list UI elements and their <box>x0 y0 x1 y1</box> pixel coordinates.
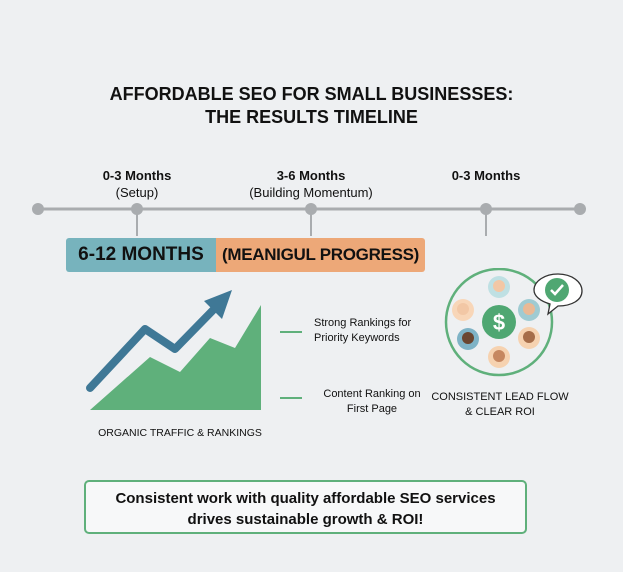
callout box <box>84 480 527 534</box>
timeline labels: (Setup) <box>116 185 158 200</box>
lead flow caption <box>431 391 569 418</box>
legend items <box>280 317 421 415</box>
callout box: drives sustainable growth & ROI! <box>188 511 423 528</box>
timeline labels: 3-6 Months <box>277 168 345 183</box>
legend items: Strong Rankings for Priority Keywords <box>314 317 411 344</box>
title: THE RESULTS TIMELINE <box>205 107 418 127</box>
lead flow caption: CONSISTENT LEAD FLOW <box>431 391 569 403</box>
badge: 6-12 months <box>66 238 425 272</box>
lead flow caption: & CLEAR ROI <box>465 406 535 418</box>
title <box>110 84 513 127</box>
callout box: Consistent work with quality affordable SEO services <box>115 490 496 507</box>
badge: 6-12 months: 6-12 MONTHS <box>78 244 204 265</box>
chart caption: ORGANIC TRAFFIC & RANKINGS <box>98 427 262 439</box>
title: AFFORDABLE SEO FOR SMALL BUSINESSES: <box>110 84 513 104</box>
timeline labels <box>103 168 520 200</box>
icon: lead flow circle <box>444 268 583 376</box>
timeline labels: 0-3 Months <box>103 168 171 183</box>
legend items: Content Ranking on First Page <box>323 388 421 415</box>
icon: lead flow circle: $ <box>493 310 505 335</box>
badge: 6-12 months: (MEANIGUL PROGRESS) <box>222 245 419 264</box>
timeline labels: (Building Momentum) <box>249 185 373 200</box>
timeline labels: 0-3 Months <box>452 168 520 183</box>
chart: organic traffic <box>86 290 261 410</box>
